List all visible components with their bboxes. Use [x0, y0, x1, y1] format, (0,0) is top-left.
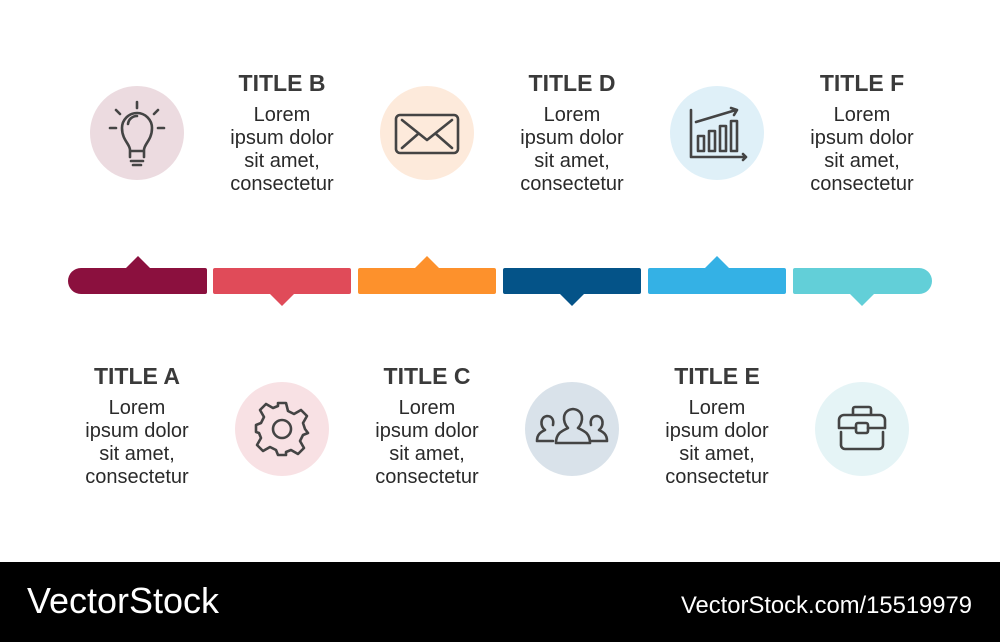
text: title A: ipsum dolor: [85, 420, 189, 442]
icon: envelope: [380, 86, 474, 180]
text: title D: ipsum dolor: [520, 127, 624, 149]
text: title C: consectetur: [375, 466, 479, 488]
text: title F: Lorem: [834, 104, 890, 126]
text: title A: [85, 363, 189, 488]
text: title F: TITLE F: [820, 70, 904, 96]
text: title E: [665, 363, 769, 488]
text: title C: [375, 363, 479, 488]
text: title B: consectetur: [230, 173, 334, 195]
text: title D: consectetur: [520, 173, 624, 195]
text: title E: ipsum dolor: [665, 420, 769, 442]
footer: VectorStock.com/15519979: [681, 592, 972, 619]
text: title E: sit amet,: [679, 443, 755, 465]
text: title D: Lorem: [544, 104, 600, 126]
icon: people: [525, 382, 619, 476]
icon: briefcase: [815, 382, 909, 476]
text: title B: sit amet,: [244, 150, 320, 172]
icon: light bulb: [90, 86, 184, 180]
text: title E: Lorem: [689, 397, 745, 419]
text: title C: ipsum dolor: [375, 420, 479, 442]
text: title C: Lorem: [399, 397, 455, 419]
text: title C: sit amet,: [389, 443, 465, 465]
text: title F: consectetur: [810, 173, 914, 195]
text: title B: Lorem: [254, 104, 310, 126]
text: title A: consectetur: [85, 466, 189, 488]
text: title B: TITLE B: [239, 70, 325, 96]
text: title D: [520, 70, 624, 195]
text: title F: [810, 70, 914, 195]
timeline bar: [68, 256, 932, 306]
text: title B: ipsum dolor: [230, 127, 334, 149]
icon: gear: [235, 382, 329, 476]
footer: VectorStock: [27, 580, 220, 621]
text: title D: TITLE D: [529, 70, 615, 96]
text: title D: sit amet,: [534, 150, 610, 172]
text: title E: consectetur: [665, 466, 769, 488]
text: title A: TITLE A: [94, 363, 180, 389]
footer: [0, 562, 1000, 642]
icon: bar chart: [670, 86, 764, 180]
text: title F: ipsum dolor: [810, 127, 914, 149]
text: title E: TITLE E: [674, 363, 760, 389]
text: title F: sit amet,: [824, 150, 900, 172]
text: title A: Lorem: [109, 397, 165, 419]
text: title A: sit amet,: [99, 443, 175, 465]
text: title B: [230, 70, 334, 195]
text: title C: TITLE C: [384, 363, 470, 389]
